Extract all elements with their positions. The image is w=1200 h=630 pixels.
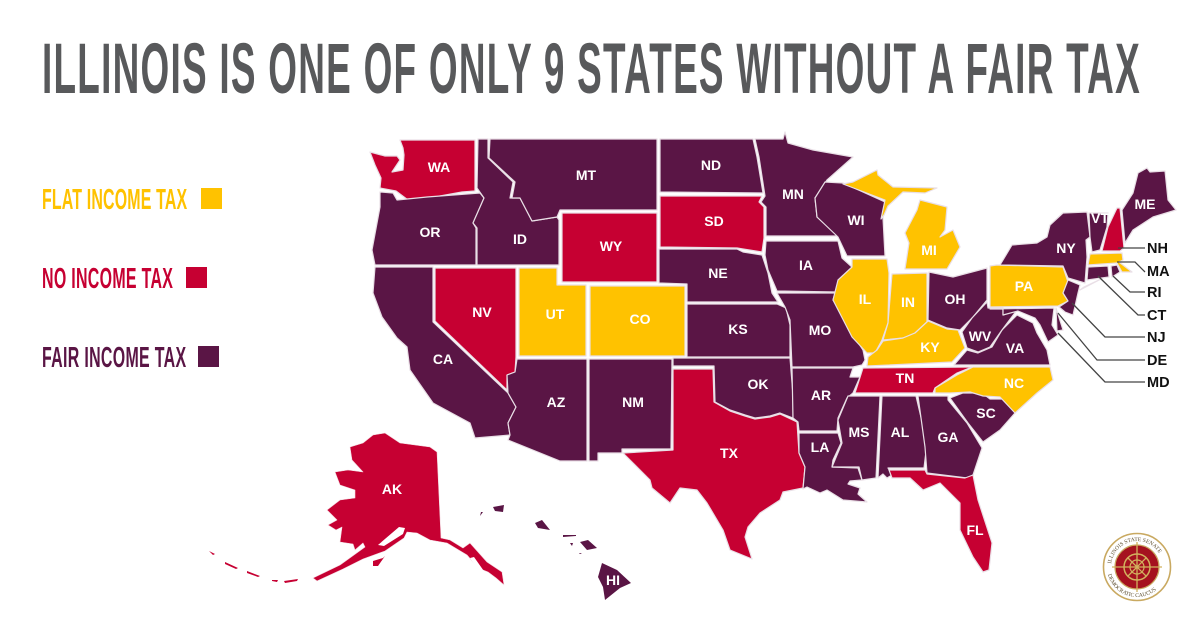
state: TN: TN: [896, 370, 914, 386]
callout: DE: [1058, 313, 1167, 369]
state: MA: [1088, 253, 1132, 272]
legend item: no income tax: NO INCOME TAX: [42, 262, 173, 294]
state: NM: [589, 359, 672, 461]
callout: RI: [1113, 276, 1162, 301]
state: OK: OK: [748, 376, 768, 392]
callout: NH: NH: [1147, 241, 1168, 257]
state: UT: [519, 268, 586, 356]
state: WA: WA: [428, 159, 450, 175]
state: OR: [372, 192, 484, 265]
state: OH: [928, 268, 987, 330]
state: IA: [765, 241, 852, 292]
state: KY: KY: [920, 339, 940, 355]
state: KS: KS: [728, 321, 748, 337]
state: NC: [935, 367, 1053, 413]
state: MO: [777, 293, 865, 367]
state: FL: [889, 470, 992, 572]
state: CA: [373, 267, 516, 438]
state: TX: TX: [720, 445, 739, 461]
state: VT: VT: [1091, 210, 1109, 226]
state: VA: [954, 315, 1050, 365]
state: IA: IA: [799, 257, 813, 273]
state: WY: [562, 213, 657, 282]
state: IL: [833, 259, 889, 353]
title: ILLINOIS IS ONE OF ONLY 9 STATES WITHOUT A FAIR TAX: [42, 29, 1140, 108]
state: KS: [687, 304, 790, 357]
state: MT: [489, 139, 657, 221]
state: OK: [673, 358, 793, 418]
state: CO: [590, 286, 685, 356]
state: AK: [209, 433, 504, 585]
state: SD: [660, 196, 764, 252]
callout: NJ: [1072, 303, 1166, 346]
state: MD: [990, 308, 1058, 342]
state: MO: MO: [809, 322, 831, 338]
state: ID: [473, 139, 559, 265]
state: AR: [792, 368, 860, 431]
state: LA: LA: [811, 439, 829, 455]
state: MS: [832, 396, 880, 480]
state: AK: AK: [382, 481, 402, 497]
state: NE: [659, 249, 778, 302]
state: TX: [623, 369, 805, 559]
callout: CT: [1098, 276, 1166, 324]
state: NV: [435, 268, 516, 390]
state: CO: CO: [630, 311, 651, 327]
state: DE: [1056, 308, 1063, 331]
state: ND: ND: [701, 157, 721, 173]
callout: MD: MD: [1147, 375, 1170, 391]
state: NC: NC: [1004, 375, 1024, 391]
state: MS: MS: [848, 424, 870, 440]
legend: [42, 183, 222, 373]
state: WA: [370, 140, 475, 200]
state: SD: SD: [704, 213, 724, 229]
state: SC: [950, 393, 1015, 442]
callout: MA: [1117, 262, 1170, 280]
state: CA: CA: [433, 351, 453, 367]
state: VA: VA: [1006, 340, 1024, 356]
map of US states: [209, 132, 1176, 600]
state: WI: WI: [847, 212, 865, 228]
callouts for northeast states: [1058, 241, 1170, 391]
logo: Illinois State Senate Democratic Caucus seal: DEMOCRATIC CAUCUS: [1108, 574, 1156, 597]
state: MN: MN: [782, 186, 804, 202]
state: ID: ID: [513, 231, 527, 247]
callout: CT: CT: [1147, 308, 1166, 324]
state: MI: [843, 170, 960, 269]
state: WV: [962, 302, 1017, 352]
state: NY: [1000, 212, 1103, 290]
callout: MD: [1058, 333, 1170, 391]
state: WY: WY: [600, 238, 623, 254]
state: AZ: [507, 359, 587, 461]
state: KY: [867, 321, 965, 366]
state: AL: AL: [891, 424, 910, 440]
state: ME: [1122, 168, 1176, 243]
logo: Illinois State Senate Democratic Caucus seal: ILLINOIS STATE SENATE: [1108, 537, 1162, 564]
state: LA: [799, 433, 867, 502]
state: AR: AR: [811, 387, 831, 403]
state: UT: UT: [546, 306, 565, 322]
state: FL: FL: [966, 522, 984, 538]
state: AZ: AZ: [547, 394, 566, 410]
state: NM: NM: [622, 394, 644, 410]
state: NJ: [1059, 280, 1080, 315]
state: PA: [990, 265, 1068, 307]
state: GA: GA: [938, 429, 958, 445]
state: HI: [480, 505, 631, 600]
state: MN: [755, 132, 853, 236]
callout: NH: [1118, 241, 1168, 257]
state: NY: NY: [1056, 240, 1076, 256]
state: IN: [883, 273, 927, 340]
legend item: fair income tax: FAIR INCOME TAX: [42, 341, 186, 373]
state: NV: NV: [472, 304, 492, 320]
callout: NJ: NJ: [1147, 330, 1166, 346]
state: RI: [1111, 265, 1120, 277]
state: NE: NE: [708, 265, 728, 281]
state: OH: OH: [944, 291, 966, 307]
state: IL: IL: [859, 291, 872, 307]
state: PA: PA: [1015, 278, 1033, 294]
state: TN: [855, 367, 972, 393]
state: VT: [1089, 210, 1109, 252]
state: CT: [1087, 266, 1109, 280]
logo: Illinois State Senate Democratic Caucus seal: [1102, 532, 1172, 602]
state: SC: SC: [976, 405, 996, 421]
callout: RI: RI: [1147, 285, 1162, 301]
state: GA: [918, 396, 982, 478]
state: HI: HI: [606, 572, 620, 588]
state: AL: [878, 396, 927, 478]
state: WV: WV: [969, 328, 992, 344]
state: NH: [1102, 208, 1124, 251]
state: MI: MI: [921, 242, 937, 258]
state: IN: IN: [901, 294, 915, 310]
state: OR: OR: [420, 224, 440, 240]
state: MT: MT: [576, 167, 597, 183]
state: ND: [660, 139, 763, 193]
callout: MA: MA: [1147, 264, 1170, 280]
state: WI: [815, 182, 885, 256]
legend item: flat income tax: FLAT INCOME TAX: [42, 183, 187, 215]
state: ME: ME: [1134, 196, 1156, 212]
callout: DE: DE: [1147, 353, 1167, 369]
